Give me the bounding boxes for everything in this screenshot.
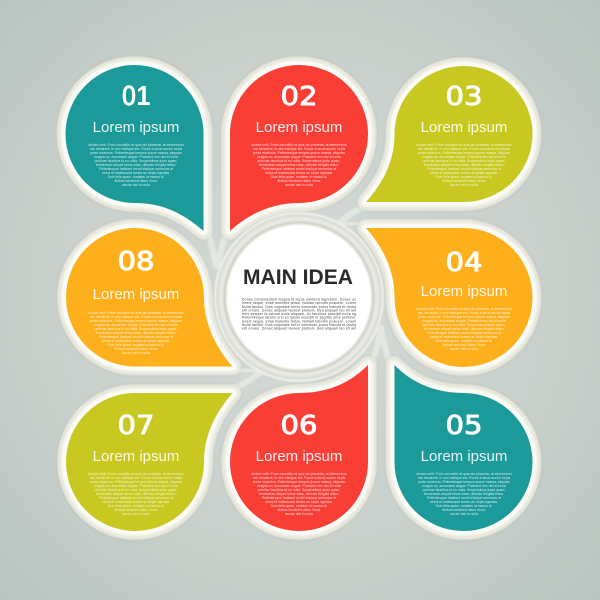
- text 02: fermentum aliquet tellus vitae, ultricies fringilla tellus.: [259, 163, 339, 167]
- text 04: fermentum aliquet tellus vitae, ultricies fringilla tellus.: [424, 327, 504, 331]
- main idea heading: MAIN IDEA: [243, 265, 353, 289]
- text 02: auctor nisi in nulla: [285, 183, 313, 187]
- text 03: Pellentesque habitant morbi tristique senectus et: [427, 167, 501, 171]
- text 01: pulvinar faucibus id eu nulla. Suspendisse justo quam,: [95, 159, 177, 163]
- text 08: auctor nisi in nulla: [122, 351, 150, 355]
- text 03: magna ac, accumsan augue. Praesent nec nisi id nulla: [422, 155, 506, 159]
- text 03: auctor nisi in nulla: [450, 183, 478, 187]
- text 06: magna ac, accumsan augue. Praesent nec nisi id nulla: [257, 484, 341, 488]
- text 03: porta maximus. Pellentesque tempus ipsum massa, aliquam: [418, 151, 510, 155]
- panel 07: [66, 393, 232, 531]
- main idea text: Nulla facilisi. Duis vulputate tortor commodo purus blandit et tristiq: [242, 323, 356, 327]
- text 01: finibus hendrerit diam. Nunc: [115, 179, 158, 183]
- text 05: porta maximus. Pellentesque tempus ipsum massa, aliquam: [418, 480, 510, 484]
- shape 06: [230, 365, 368, 531]
- text 06: finibus hendrerit diam. Nunc: [278, 508, 321, 512]
- heading 02: Lorem ipsum: [256, 119, 342, 136]
- main idea text: elit ornare. Donec aliquam laoreet pretium. Sed aliquam leo sit am: [242, 326, 356, 330]
- text 04: nisi hendrerit. In nec tristique est. Fusce a lacus auctor turpis: [418, 311, 511, 315]
- text 04: Duis felis quam, sodales ut massa id,: [436, 339, 492, 343]
- text 06: Pellentesque habitant morbi tristique senectus et: [262, 496, 336, 500]
- text 05: magna ac, accumsan augue. Praesent nec nisi id nulla: [422, 484, 506, 488]
- text 01: auctor nisi in nulla: [122, 183, 150, 187]
- main idea text: felis semper id rutrum nulla aliquam. Ut faucibus suscipit nulla eg: [242, 312, 356, 316]
- heading 08: Lorem ipsum: [93, 286, 179, 303]
- text 05: Pellentesque habitant morbi tristique senectus et: [427, 496, 501, 500]
- text 02: porta maximus. Pellentesque tempus ipsum massa, aliquam: [253, 151, 345, 155]
- heading 01: Lorem ipsum: [93, 119, 179, 136]
- text 05: finibus hendrerit diam. Nunc: [443, 508, 486, 512]
- main idea text: lorem neque, vitae molestie tellus. Nullam lobortis posuere. Lorem: [242, 301, 356, 305]
- shape 07: [66, 393, 232, 531]
- number 01: 01: [122, 80, 150, 112]
- text 08: porta maximus. Pellentesque tempus ipsum massa, aliquam: [90, 319, 182, 323]
- text 02: pulvinar faucibus id eu nulla. Suspendisse justo quam,: [258, 159, 340, 163]
- text 08: pulvinar faucibus id eu nulla. Suspendisse justo quam,: [95, 327, 177, 331]
- heading 06: Lorem ipsum: [256, 448, 342, 465]
- panel 05: [394, 365, 533, 531]
- text 07: magna ac, accumsan augue. Praesent nec nisi id nulla: [94, 484, 178, 488]
- main idea text: lorem neque, vitae molestie tellus. Nullam lobortis posuere. Lorem: [242, 319, 356, 323]
- connecting channels: [206, 205, 392, 390]
- shape 03: [366, 66, 533, 202]
- text 08: magna ac, accumsan augue. Praesent nec nisi id nulla: [94, 323, 178, 327]
- text 06: netus et malesuada fames ac turpis egestas.: [265, 500, 333, 504]
- text 08: netus et malesuada fames ac turpis egestas.: [102, 339, 170, 343]
- text 05: auctor nisi in nulla: [450, 512, 478, 516]
- text 03: pulvinar faucibus id eu nulla. Suspendisse justo quam,: [423, 159, 505, 163]
- text 02: Duis felis quam, sodales ut massa id,: [271, 175, 327, 179]
- text 08: Duis felis quam, sodales ut massa id,: [108, 343, 164, 347]
- text 01: porta maximus. Pellentesque tempus ipsum massa, aliquam: [90, 151, 182, 155]
- text 06: fermentum aliquet tellus vitae, ultricies fringilla tellus.: [259, 492, 339, 496]
- text 06: pulvinar faucibus id eu nulla. Suspendisse justo quam,: [258, 488, 340, 492]
- text 01: nisi hendrerit. In nec tristique est. Fusce a lacus auctor turpis: [90, 147, 183, 151]
- text 08: dictum velit. Proin convallis mi quis dui pharetra, at elementum: [88, 311, 184, 315]
- text 04: netus et malesuada fames ac turpis egestas.: [430, 335, 498, 339]
- shape 04: [366, 228, 532, 367]
- text 05: nisi hendrerit. In nec tristique est. Fusce a lacus auctor turpis: [418, 476, 511, 480]
- text 07: finibus hendrerit diam. Nunc: [115, 508, 158, 512]
- text 04: dictum velit. Proin convallis mi quis dui pharetra, at elementum: [416, 307, 512, 311]
- number 02: 02: [280, 82, 318, 112]
- panel 04: [366, 228, 532, 367]
- text 03: dictum velit. Proin convallis mi quis dui pharetra, at elementum: [416, 143, 512, 147]
- number 07: 07: [118, 411, 154, 441]
- panel 06: [230, 365, 368, 531]
- text 01: magna ac, accumsan augue. Praesent nec nisi id nulla: [94, 155, 178, 159]
- text 07: nisi hendrerit. In nec tristique est. Fusce a lacus auctor turpis: [90, 476, 183, 480]
- text 03: fermentum aliquet tellus vitae, ultricies fringilla tellus.: [424, 163, 504, 167]
- shape 01: [66, 65, 204, 231]
- number 04: 04: [446, 248, 482, 278]
- text 04: pulvinar faucibus id eu nulla. Suspendisse justo quam,: [423, 323, 505, 327]
- text 08: fermentum aliquet tellus vitae, ultricies fringilla tellus.: [96, 331, 176, 335]
- main idea text: Donec condimentum magna id lacus eleifend dignissim. Donec ac: [242, 298, 356, 302]
- panel 08: [66, 228, 232, 366]
- panel 02: [230, 65, 368, 231]
- text 05: netus et malesuada fames ac turpis egestas.: [430, 500, 498, 504]
- text 05: pulvinar faucibus id eu nulla. Suspendisse justo quam,: [423, 488, 505, 492]
- text 01: Pellentesque habitant morbi tristique senectus et: [99, 167, 173, 171]
- number 08: 08: [118, 247, 154, 277]
- text 07: auctor nisi in nulla: [122, 512, 150, 516]
- heading 03: Lorem ipsum: [421, 119, 507, 136]
- text 01: netus et malesuada fames ac turpis egestas.: [102, 171, 170, 175]
- number 03: 03: [446, 82, 482, 112]
- text 01: Duis felis quam, sodales ut massa id,: [108, 175, 164, 179]
- heading 05: Lorem ipsum: [421, 448, 507, 465]
- text 06: nisi hendrerit. In nec tristique est. Fusce a lacus auctor turpis: [253, 476, 346, 480]
- text 06: porta maximus. Pellentesque tempus ipsum massa, aliquam: [253, 480, 345, 484]
- text 04: auctor nisi in nulla: [450, 347, 478, 351]
- central circle: [215, 213, 383, 381]
- text 07: dictum velit. Proin convallis mi quis dui pharetra, at elementum: [88, 472, 184, 476]
- text 02: dictum velit. Proin convallis mi quis dui pharetra, at elementum: [251, 143, 347, 147]
- main idea text: Nulla facilisi. Duis vulputate tortor commodo purus blandit et tristiq: [242, 305, 356, 309]
- text 02: netus et malesuada fames ac turpis egestas.: [265, 171, 333, 175]
- text 05: fermentum aliquet tellus vitae, ultricies fringilla tellus.: [424, 492, 504, 496]
- text 04: Pellentesque habitant morbi tristique senectus et: [427, 331, 501, 335]
- panel 01: [66, 65, 204, 231]
- shape 05: [394, 365, 533, 531]
- text 07: Duis felis quam, sodales ut massa id,: [108, 504, 164, 508]
- text 08: nisi hendrerit. In nec tristique est. Fusce a lacus auctor turpis: [90, 315, 183, 319]
- main idea text: elit ornare. Donec aliquam laoreet pretium. Sed aliquam leo sit am: [242, 308, 356, 312]
- text 01: dictum velit. Proin convallis mi quis dui pharetra, at elementum: [88, 143, 184, 147]
- text 06: Duis felis quam, sodales ut massa id,: [271, 504, 327, 508]
- text 07: pulvinar faucibus id eu nulla. Suspendisse justo quam,: [95, 488, 177, 492]
- text 03: finibus hendrerit diam. Nunc: [443, 179, 486, 183]
- text 02: nisi hendrerit. In nec tristique est. Fusce a lacus auctor turpis: [253, 147, 346, 151]
- panel 03: [366, 66, 533, 202]
- text 07: porta maximus. Pellentesque tempus ipsum massa, aliquam: [90, 480, 182, 484]
- main idea text: Pellentesque iaculis orci eu ipsum suscipit in sagittis urna porttitor.: [242, 316, 356, 320]
- text 03: netus et malesuada fames ac turpis egestas.: [430, 171, 498, 175]
- text 03: nisi hendrerit. In nec tristique est. Fusce a lacus auctor turpis: [418, 147, 511, 151]
- text 02: magna ac, accumsan augue. Praesent nec nisi id nulla: [257, 155, 341, 159]
- number 06: 06: [280, 411, 318, 441]
- text 02: Pellentesque habitant morbi tristique senectus et: [262, 167, 336, 171]
- text 07: fermentum aliquet tellus vitae, ultricies fringilla tellus.: [96, 492, 176, 496]
- number 05: 05: [446, 411, 482, 441]
- text 04: finibus hendrerit diam. Nunc: [443, 343, 486, 347]
- text 01: fermentum aliquet tellus vitae, ultricies fringilla tellus.: [96, 163, 176, 167]
- text 06: dictum velit. Proin convallis mi quis dui pharetra, at elementum: [251, 472, 347, 476]
- text 07: Pellentesque habitant morbi tristique senectus et: [99, 496, 173, 500]
- text 03: Duis felis quam, sodales ut massa id,: [436, 175, 492, 179]
- text 05: dictum velit. Proin convallis mi quis dui pharetra, at elementum: [416, 472, 512, 476]
- heading 07: Lorem ipsum: [93, 448, 179, 465]
- shape 02: [230, 65, 368, 231]
- text 04: porta maximus. Pellentesque tempus ipsum massa, aliquam: [418, 315, 510, 319]
- heading 04: Lorem ipsum: [421, 283, 507, 300]
- text 04: magna ac, accumsan augue. Praesent nec nisi id nulla: [422, 319, 506, 323]
- text 08: Pellentesque habitant morbi tristique senectus et: [99, 335, 173, 339]
- text 07: netus et malesuada fames ac turpis egestas.: [102, 500, 170, 504]
- text 02: finibus hendrerit diam. Nunc: [278, 179, 321, 183]
- text 06: auctor nisi in nulla: [285, 512, 313, 516]
- text 05: Duis felis quam, sodales ut massa id,: [436, 504, 492, 508]
- text 08: finibus hendrerit diam. Nunc: [115, 347, 158, 351]
- shape 08: [66, 228, 232, 366]
